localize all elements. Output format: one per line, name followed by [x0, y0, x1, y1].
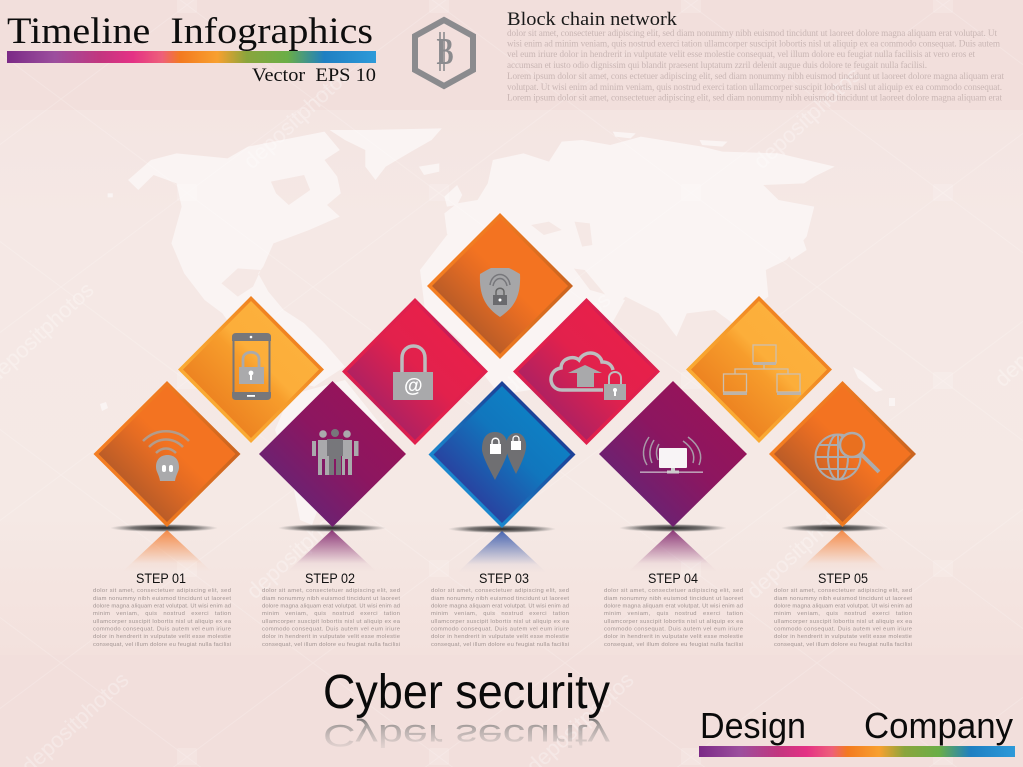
panel: step 2 purple diamond: [259, 381, 406, 572]
text block: step 03 copy: commodo consequat. Duis autem vel eum iriure: [431, 626, 569, 632]
world map: [100, 128, 895, 525]
text block: step 02 copy: consequat, vel illum dolore eu feugiat nulla facilisi: [262, 642, 400, 648]
icon: email padlock: @: [404, 376, 422, 397]
watermarks: depositphotos: [238, 62, 356, 174]
text block: step 02 copy: dolor in hendrerit in vulputate velit esse molestie: [262, 634, 400, 640]
paragraph: lorem ipsum: Lorem ipsum dolor sit amet, cons ectetuer adipiscing elit, sed diam nonummy nibh euismod tincidunt ut laoreet dolore magna aliquam erat: [507, 71, 1004, 81]
icon: bitcoin hexagon: B: [436, 31, 454, 73]
text block: step 03 copy: dolor sit amet, consectetuer adipiscing elit, sed: [431, 588, 569, 594]
text block: step 03 copy: dolore magna aliquam erat volutpat. Ut wisi enim ad: [431, 604, 569, 610]
rainbow bar: title: [7, 51, 376, 63]
watermarks: depositphotos: [748, 62, 866, 174]
text block: step 04 copy: dolor sit amet, consectetuer adipiscing elit, sed: [604, 588, 743, 594]
text block: step 01 copy: consequat, vel illum dolore eu feugiat nulla facilisi: [93, 642, 231, 648]
text block: step 04 copy: commodo consequat. Duis autem vel eum iriure: [604, 626, 743, 632]
text block: step 01 copy: ullamcorper suscipit lobortis nisl ut aliquip ex ea: [93, 619, 232, 625]
panel: top orange diamond with shield: [427, 213, 573, 359]
heading: Cyber security with reflection: Cyber security: [323, 718, 611, 754]
step 03 column: [431, 571, 570, 648]
text block: step 02 copy: dolore magna aliquam erat volutpat. Ut wisi enim ad: [262, 604, 400, 610]
text block: step 05 copy: [774, 588, 913, 648]
panel: red diamond with email lock: [342, 298, 488, 445]
icon: skull with wifi: [143, 431, 189, 481]
text block: step 01 copy: dolor sit amet, consectetuer adipiscing elit, sed: [93, 588, 231, 594]
text block: step 04 copy: dolor in hendrerit in vulputate velit esse molestie: [604, 634, 743, 640]
text block: Block chain network: [507, 9, 1004, 102]
title block: [7, 11, 376, 86]
heading: Cyber security with reflection: Cyber security: [323, 666, 610, 719]
step 05 column: [774, 571, 913, 648]
title: Timeline Infographics: Timeline Infographics: [7, 11, 373, 52]
text block: step 03 copy: [431, 588, 570, 648]
text block: step 02 copy: dolor sit amet, consectetuer adipiscing elit, sed: [262, 588, 400, 594]
text block: step 04 copy: consequat, vel illum dolore eu feugiat nulla facilisi: [604, 642, 743, 648]
watermarks: depositphotos: [741, 492, 859, 604]
label: STEP 05: STEP 05: [818, 571, 868, 586]
text block: step 03 copy: diam nonummy nibh euismod tincidunt ut laoreet: [431, 596, 569, 602]
paragraph: lorem ipsum: [507, 28, 1004, 102]
text block: step 04 copy: dolore magna aliquam erat volutpat. Ut wisi enim ad: [604, 604, 743, 610]
watermarks: depositphotos: [498, 287, 616, 399]
step 02 column: [262, 571, 401, 648]
icon: three people: [312, 429, 358, 475]
panel: step 3 blue diamond: [428, 381, 576, 573]
label: STEP 02: STEP 02: [305, 571, 355, 586]
text block: step 05 copy: consequat, vel illum dolore eu feugiat nulla facilisi: [774, 642, 912, 648]
step 01 column: [93, 571, 232, 648]
panel: red diamond with cloud upload: [513, 298, 660, 445]
icon: globe with magnifier: [816, 433, 879, 480]
heading: Cyber security with reflection: [323, 666, 611, 754]
text block: step 02 copy: ullamcorper suscipit lobortis nisl ut aliquip ex ea: [262, 619, 401, 625]
text block: step 03 copy: ullamcorper suscipit lobortis nisl ut aliquip ex ea: [431, 619, 570, 625]
text block: step 05 copy: commodo consequat. Duis autem vel eum iriure: [774, 626, 912, 632]
panel: step 4 purple diamond: [599, 381, 747, 572]
icon: bitcoin hexagon: [415, 20, 473, 86]
text block: step 04 copy: diam nonummy nibh euismod tincidunt ut laoreet: [604, 596, 743, 602]
panel: yellow diamond with network: [686, 296, 832, 443]
icon: email padlock: [393, 346, 433, 400]
panel: step 5 orange diamond: [769, 381, 916, 572]
text block: step 04 copy: minim veniam, quis nostrud exerci tation: [604, 611, 743, 617]
text block: step 05 copy: dolor sit amet, consectetuer adipiscing elit, sed: [774, 588, 912, 594]
text block: step 03 copy: minim veniam, quis nostrud exerci tation: [431, 611, 569, 617]
paragraph: lorem ipsum: dolor sit amet, consectetuer adipiscing elit, sed diam nonummy nibh euismod tincidunt ut laoreet dolore magna aliquam erat volutpat. Ut: [507, 28, 997, 38]
rainbow bar: footer: [699, 746, 1015, 757]
text block: step 05 copy: dolor in hendrerit in vulputate velit esse molestie: [774, 634, 912, 640]
text block: step 02 copy: [262, 588, 401, 648]
text block: step 05 copy: diam nonummy nibh euismod tincidunt ut laoreet: [774, 596, 912, 602]
paragraph: lorem ipsum: accumsan et iusto odio dignissim qui blandit praesent luptatum zzril delenit augue duis dolore te feugait nulla facilisi.: [507, 60, 927, 70]
text block: step 01 copy: [93, 588, 232, 648]
label: Company: Company: [864, 705, 1013, 746]
step 04 column: [604, 571, 744, 648]
text block: step 05 copy: minim veniam, quis nostrud exerci tation: [774, 611, 912, 617]
label: Design: Design: [700, 705, 806, 746]
icon: wifi shield: [480, 268, 520, 317]
paragraph: lorem ipsum: wisi enim ad minim veniam, quis nostrud exerci tation ullamcorper suscipit lobortis nisl ut aliquip ex ea commodo consequat. Duis autem: [507, 38, 1000, 48]
text block: step 05 copy: dolore magna aliquam erat volutpat. Ut wisi enim ad: [774, 604, 912, 610]
text block: step 01 copy: commodo consequat. Duis autem vel eum iriure: [93, 626, 231, 632]
text block: step 02 copy: commodo consequat. Duis autem vel eum iriure: [262, 626, 400, 632]
text block: step 01 copy: minim veniam, quis nostrud exerci tation: [93, 611, 231, 617]
panel: step 1 orange diamond: [94, 381, 240, 572]
panel: yellow diamond with phone lock: [178, 296, 324, 443]
text block: step 02 copy: minim veniam, quis nostrud exerci tation: [262, 611, 400, 617]
text block: step 05 copy: ullamcorper suscipit lobortis nisl ut aliquip ex ea: [774, 619, 913, 625]
label: STEP 04: STEP 04: [648, 571, 698, 586]
icon: phone lock: [232, 333, 271, 400]
paragraph: lorem ipsum: Lorem ipsum dolor sit amet, consectetuer adipiscing elit, sed diam nonummy nibh euismod tincidunt ut laoreet dolore magna aliquam erat: [507, 92, 1002, 102]
icon: computer network: [723, 345, 801, 395]
label: STEP 03: STEP 03: [479, 571, 529, 586]
text block: step 01 copy: dolor in hendrerit in vulputate velit esse molestie: [93, 634, 231, 640]
text block: step 03 copy: consequat, vel illum dolore eu feugiat nulla facilisi: [431, 642, 569, 648]
text block: step 04 copy: ullamcorper suscipit lobortis nisl ut aliquip ex ea: [604, 619, 744, 625]
watermarks: depositphotos: [241, 492, 359, 604]
heading: Block chain network: Block chain network: [507, 9, 678, 30]
text block: step 02 copy: diam nonummy nibh euismod tincidunt ut laoreet: [262, 596, 400, 602]
icon: cloud upload with lock: [551, 353, 626, 400]
paragraph: lorem ipsum: volutpat. Ut wisi enim ad minim veniam, quis nostrud exerci tation ullamcorper suscipit lobortis nisl ut aliquip ex ea commodo consequat.: [507, 82, 1002, 92]
text block: step 04 copy: [604, 588, 744, 648]
paragraph: lorem ipsum: vel eum iriure dolor in hendrerit in vulputate velit esse molestie consequat, vel illum dolore eu feugiat nulla facilisis at vero eros et: [507, 49, 975, 59]
subtitle: Vector EPS 10: Vector EPS 10: [252, 65, 376, 86]
icon: location pins with locks: [482, 432, 526, 480]
text block: step 01 copy: diam nonummy nibh euismod tincidunt ut laoreet: [93, 596, 231, 602]
icon: wireless monitor: [640, 437, 703, 474]
footer brand: Design Company: [699, 705, 1015, 757]
label: STEP 01: STEP 01: [136, 571, 186, 586]
text block: step 01 copy: dolore magna aliquam erat volutpat. Ut wisi enim ad: [93, 604, 231, 610]
text block: step 03 copy: dolor in hendrerit in vulputate velit esse molestie: [431, 634, 569, 640]
